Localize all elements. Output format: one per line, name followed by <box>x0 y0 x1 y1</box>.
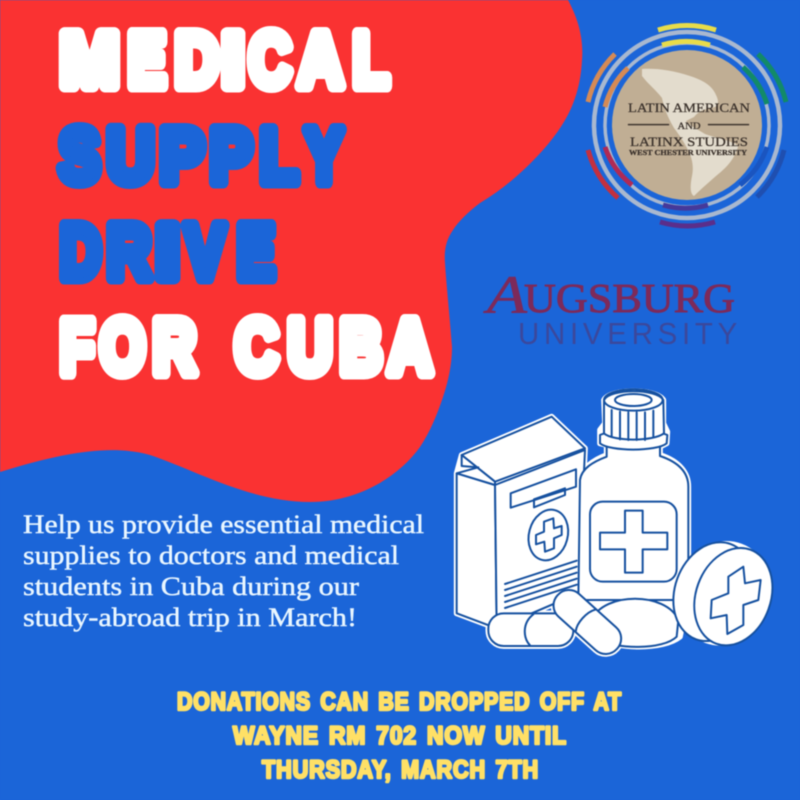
logo text: AND <box>678 122 701 132</box>
title line: MEDICAL: E <box>128 18 166 103</box>
title line: FOR CUBA: R <box>153 305 196 390</box>
body text <box>23 509 424 632</box>
donation info: THURSDAY, MARCH 7TH <box>262 756 539 784</box>
title line: MEDICAL: D <box>175 18 219 103</box>
red blob <box>0 0 582 502</box>
title line: DRIVE: V <box>185 210 225 295</box>
logo disc <box>612 50 762 200</box>
title line: FOR CUBA: A <box>388 305 432 390</box>
pill: round with cross <box>660 531 786 656</box>
pill: capsule diagonal <box>547 584 627 660</box>
title line: FOR CUBA: B <box>340 305 382 390</box>
title line: SUPPLY <box>59 114 343 199</box>
icon: medicine box, bottle and pills <box>457 389 786 660</box>
logo text: WEST CHESTER UNIVERSITY <box>629 149 747 157</box>
title line: MEDICAL: I <box>222 18 244 103</box>
title <box>59 18 432 390</box>
title line: SUPPLY: U <box>107 114 154 199</box>
title line: SUPPLY: Y <box>305 114 343 199</box>
Augsburg wordmark remainder: UGSBURG <box>524 275 735 321</box>
donation info: WAYNE RM 702 NOW UNTIL <box>233 722 567 750</box>
title line: FOR CUBA: U <box>288 305 332 390</box>
title line: FOR CUBA: C <box>235 305 278 390</box>
Augsburg wordmark initial: A <box>483 265 528 325</box>
donation info: DONATIONS CAN BE DROPPED OFF AT <box>177 688 622 716</box>
title line: FOR CUBA <box>60 305 432 390</box>
title line: DRIVE <box>60 210 275 295</box>
logo text: LATINX STUDIES <box>630 134 748 149</box>
logo rings <box>594 32 780 218</box>
title line: DRIVE: E <box>237 210 275 295</box>
logo text <box>628 100 751 157</box>
title line: MEDICAL: M <box>60 18 119 103</box>
title line: SUPPLY: P <box>210 114 252 199</box>
title line: DRIVE: D <box>60 210 101 295</box>
title line: FOR CUBA: F <box>60 305 94 390</box>
body text: supplies to doctors and medical <box>23 540 399 570</box>
donation info <box>177 688 622 784</box>
logo: Augsburg University <box>483 265 742 351</box>
title line: SUPPLY: P <box>160 114 204 199</box>
title line: FOR CUBA: O <box>100 305 145 390</box>
logo map <box>642 69 738 196</box>
logo text: LATIN AMERICAN <box>628 100 751 115</box>
University wordmark: UNIVERSITY <box>518 316 742 351</box>
logo: Latin American and Latinx Studies <box>588 26 786 226</box>
title line: SUPPLY: L <box>260 114 298 199</box>
body text: study-abroad trip in March! <box>23 602 357 632</box>
body text: Help us provide essential medical <box>23 509 424 539</box>
body text: students in Cuba during our <box>23 571 359 601</box>
title line: DRIVE: I <box>156 210 179 295</box>
pill: oval <box>592 599 678 647</box>
title line: MEDICAL: A <box>298 18 343 103</box>
pill: capsule horizontal <box>488 613 573 646</box>
title line: MEDICAL <box>60 18 389 103</box>
white silhouette <box>457 391 783 660</box>
title line: MEDICAL: C <box>249 18 291 103</box>
medicine box <box>457 417 585 628</box>
bottle <box>578 389 688 600</box>
title line: SUPPLY: S <box>59 114 100 199</box>
logo coloured arcs <box>588 26 786 226</box>
title line: MEDICAL: L <box>353 18 389 103</box>
title line: DRIVE: R <box>107 210 151 295</box>
